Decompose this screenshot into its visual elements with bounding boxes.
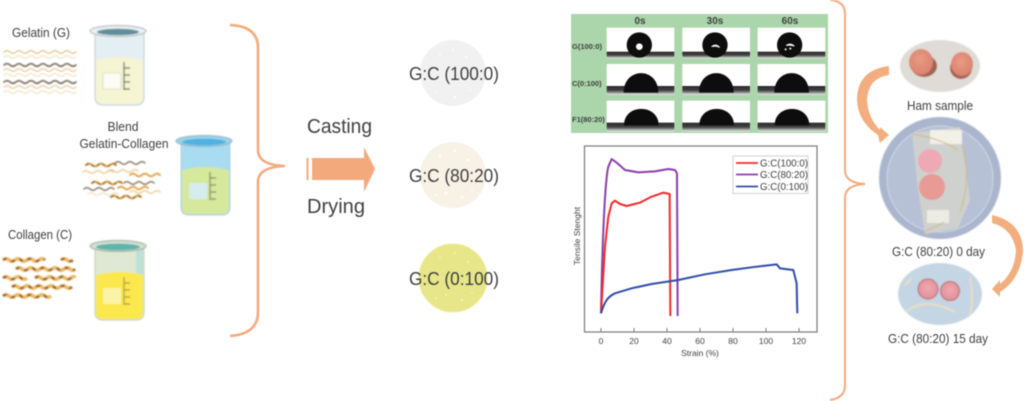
label: G:C (80:20) 0 day: G:C (80:20) 0 day [892, 245, 986, 259]
x axis ticks: 20 [629, 336, 639, 346]
chart: tensile strength vs strain [572, 146, 817, 358]
time headers: 60s [782, 16, 799, 27]
arrow: 0 day to 15 day [992, 215, 1023, 297]
bracket: left materials [230, 25, 285, 336]
label: Blend Gelatin-Collagen [80, 120, 169, 151]
bracket: results [830, 0, 865, 400]
film disc: G:C (80:20): G:C (80:20) [409, 166, 499, 186]
label: Gelatin (G): Gelatin (G) [12, 26, 70, 40]
row labels [572, 42, 605, 124]
icon: gelatin fibres [4, 51, 76, 93]
label: Blend Gelatin-Collagen: Blend [108, 120, 139, 134]
legend [733, 156, 808, 194]
arrow: casting to drying [306, 147, 375, 192]
label: Blend Gelatin-Collagen: Gelatin-Collagen [80, 137, 169, 151]
panel: contact angle images [571, 14, 828, 133]
icon: blend beaker [176, 136, 232, 215]
legend: G:C(100:0) [760, 158, 808, 170]
row labels: G(100:0) [572, 42, 603, 51]
x axis ticks [599, 336, 806, 346]
x axis ticks: 100 [759, 336, 773, 346]
label: Collagen (C): Collagen (C) [8, 228, 72, 242]
x axis ticks: 80 [728, 336, 738, 346]
curves [601, 159, 797, 316]
legend: G:C(80:20) [760, 170, 808, 181]
time headers [634, 16, 799, 27]
film disc: G:C (0:100) [409, 244, 499, 312]
film disc: G:C (80:20) [409, 142, 499, 208]
film disc: G:C (100:0) [409, 40, 499, 106]
icon: blended fibres [83, 162, 160, 198]
arrow: ham to film package [857, 66, 889, 143]
film disc: G:C (100:0): G:C (100:0) [409, 64, 499, 84]
row labels: C(0:100) [572, 79, 602, 88]
label: G:C (80:20) 15 day: G:C (80:20) 15 day [888, 332, 989, 346]
row labels: F1(80:20) [572, 115, 605, 124]
x axis ticks: 120 [792, 336, 806, 346]
x axis ticks: 60 [695, 336, 705, 346]
time headers: 30s [707, 16, 724, 27]
label: Ham sample: Ham sample [907, 99, 973, 113]
droplet image grid [607, 28, 825, 131]
y axis title: Tensile Stenght [572, 206, 582, 265]
film disc: G:C (0:100): G:C (0:100) [409, 269, 499, 289]
time headers: 0s [634, 16, 646, 27]
icon: collagen fibres [3, 259, 75, 297]
photo: G:C (80:20) 0 day [879, 117, 1001, 239]
x axis ticks: 40 [662, 336, 672, 346]
x axis ticks: 0 [599, 336, 604, 346]
legend: G:C(0:100) [760, 182, 808, 193]
photo: G:C (80:20) 15 day [898, 263, 982, 325]
icon: gelatin beaker [90, 26, 146, 105]
label: Drying: Drying [307, 196, 365, 218]
x axis title: Strain (%) [681, 348, 719, 358]
icon: collagen beaker [90, 240, 146, 320]
label: Casting: Casting [307, 116, 372, 138]
photo: ham sample [900, 40, 980, 92]
